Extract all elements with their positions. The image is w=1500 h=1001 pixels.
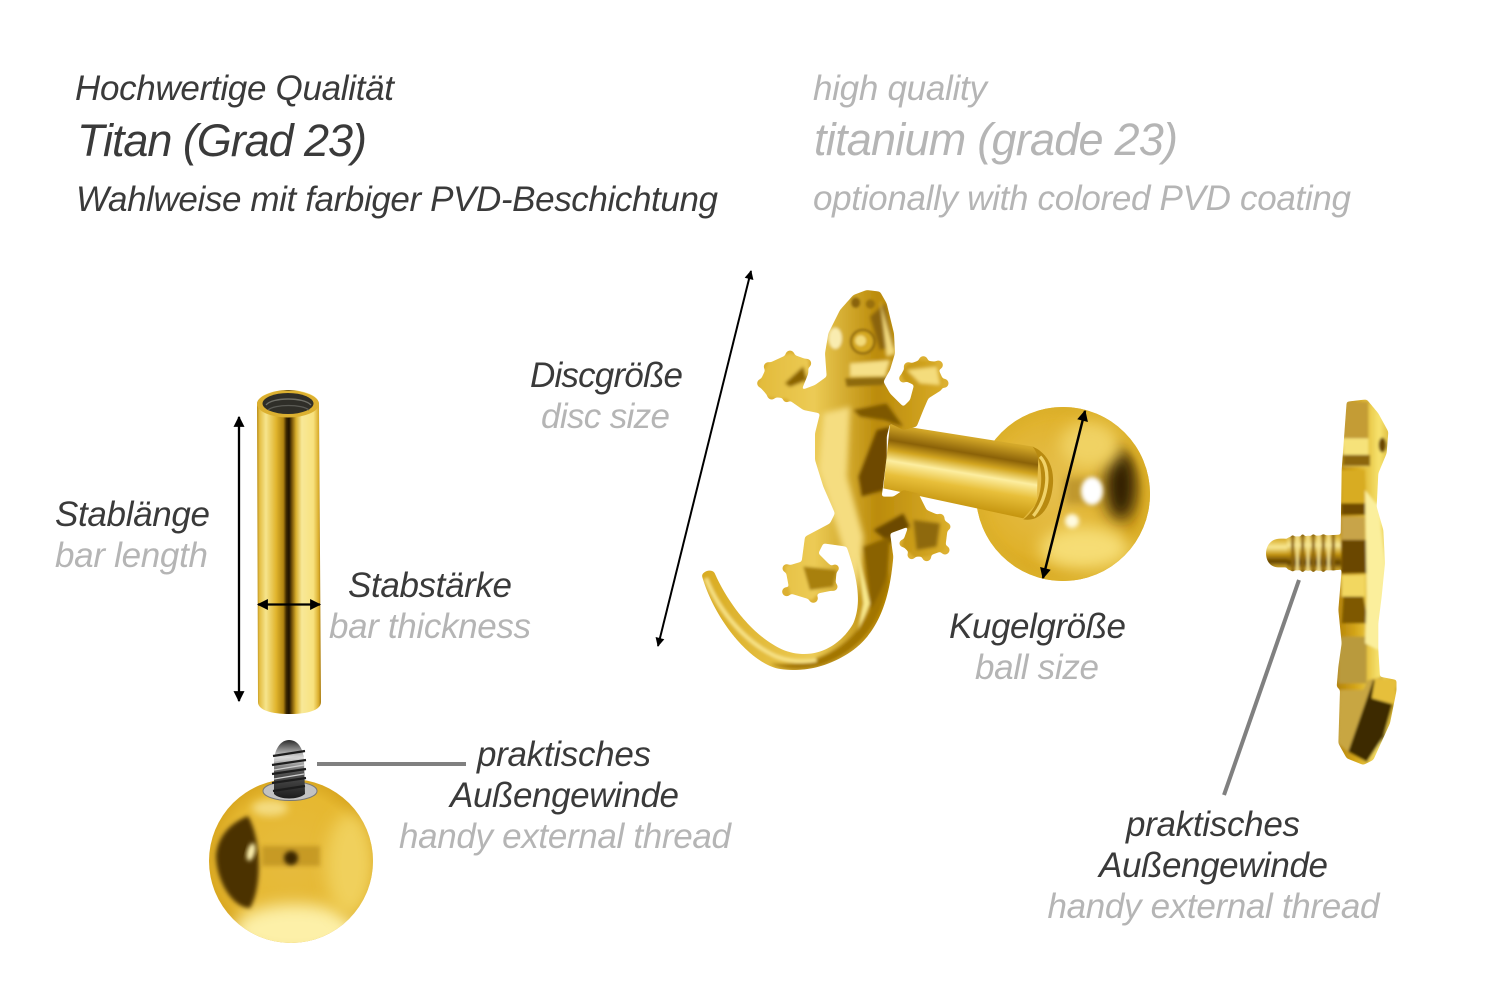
- label: bar length: bar length: [55, 536, 208, 575]
- label: external thread (left): handy external thread: [399, 817, 733, 856]
- label: external thread (left): praktisches: [476, 735, 651, 774]
- product: gold gecko: [700, 287, 953, 673]
- label: external thread (right): [1048, 805, 1381, 926]
- label: bar length: [55, 495, 210, 575]
- label: disc size: disc size: [541, 397, 670, 436]
- label: ball size: Kugelgröße: [949, 607, 1126, 646]
- heading: English quality text: [813, 69, 1352, 218]
- thread pin: [263, 740, 317, 800]
- label: bar thickness: [329, 566, 531, 646]
- label: bar thickness: Stabstärke: [348, 566, 512, 605]
- heading: German quality text: Titan (Grad 23): [77, 115, 367, 166]
- label: disc size: Discgröße: [530, 356, 683, 395]
- label: external thread (right): Außengewinde: [1097, 846, 1328, 885]
- heading: German quality text: Hochwertige Qualität: [75, 69, 395, 108]
- label: external thread (right): praktisches: [1125, 805, 1300, 844]
- heading: German quality text: Wahlweise mit farbiger PVD-Beschichtung: [76, 180, 719, 219]
- label: bar thickness: bar thickness: [329, 607, 531, 646]
- label: external thread (left): Außengewinde: [448, 776, 679, 815]
- arrow: bar thickness: [258, 603, 320, 606]
- label: ball size: [949, 607, 1126, 687]
- label: disc size: [530, 356, 683, 436]
- threaded pin: [1266, 534, 1341, 572]
- arrow: bar length: [238, 417, 240, 701]
- label: bar length: Stablänge: [55, 495, 210, 534]
- heading: English quality text: optionally with colored PVD coating: [813, 179, 1352, 218]
- product: gold ball of gecko labret: [976, 407, 1150, 581]
- arrow: ball size: [1043, 411, 1085, 578]
- gecko eyes and nostrils: [829, 297, 875, 353]
- label: external thread (right): handy external thread: [1048, 887, 1381, 926]
- heading: German quality text: [75, 69, 719, 219]
- arrow: disc size: [658, 271, 751, 646]
- leader line: external thread (left): [317, 762, 466, 766]
- label: ball size: ball size: [975, 648, 1099, 687]
- label: external thread (left): [399, 735, 733, 856]
- product: gecko side view: [1266, 397, 1398, 767]
- leader line: external thread (right): [1224, 580, 1299, 795]
- product: internally threaded bar: [257, 390, 321, 714]
- heading: English quality text: titanium (grade 23): [814, 114, 1178, 165]
- product: threaded gold ball: [209, 740, 374, 956]
- heading: English quality text: high quality: [813, 69, 990, 108]
- product: gecko labret bar: [883, 424, 1053, 520]
